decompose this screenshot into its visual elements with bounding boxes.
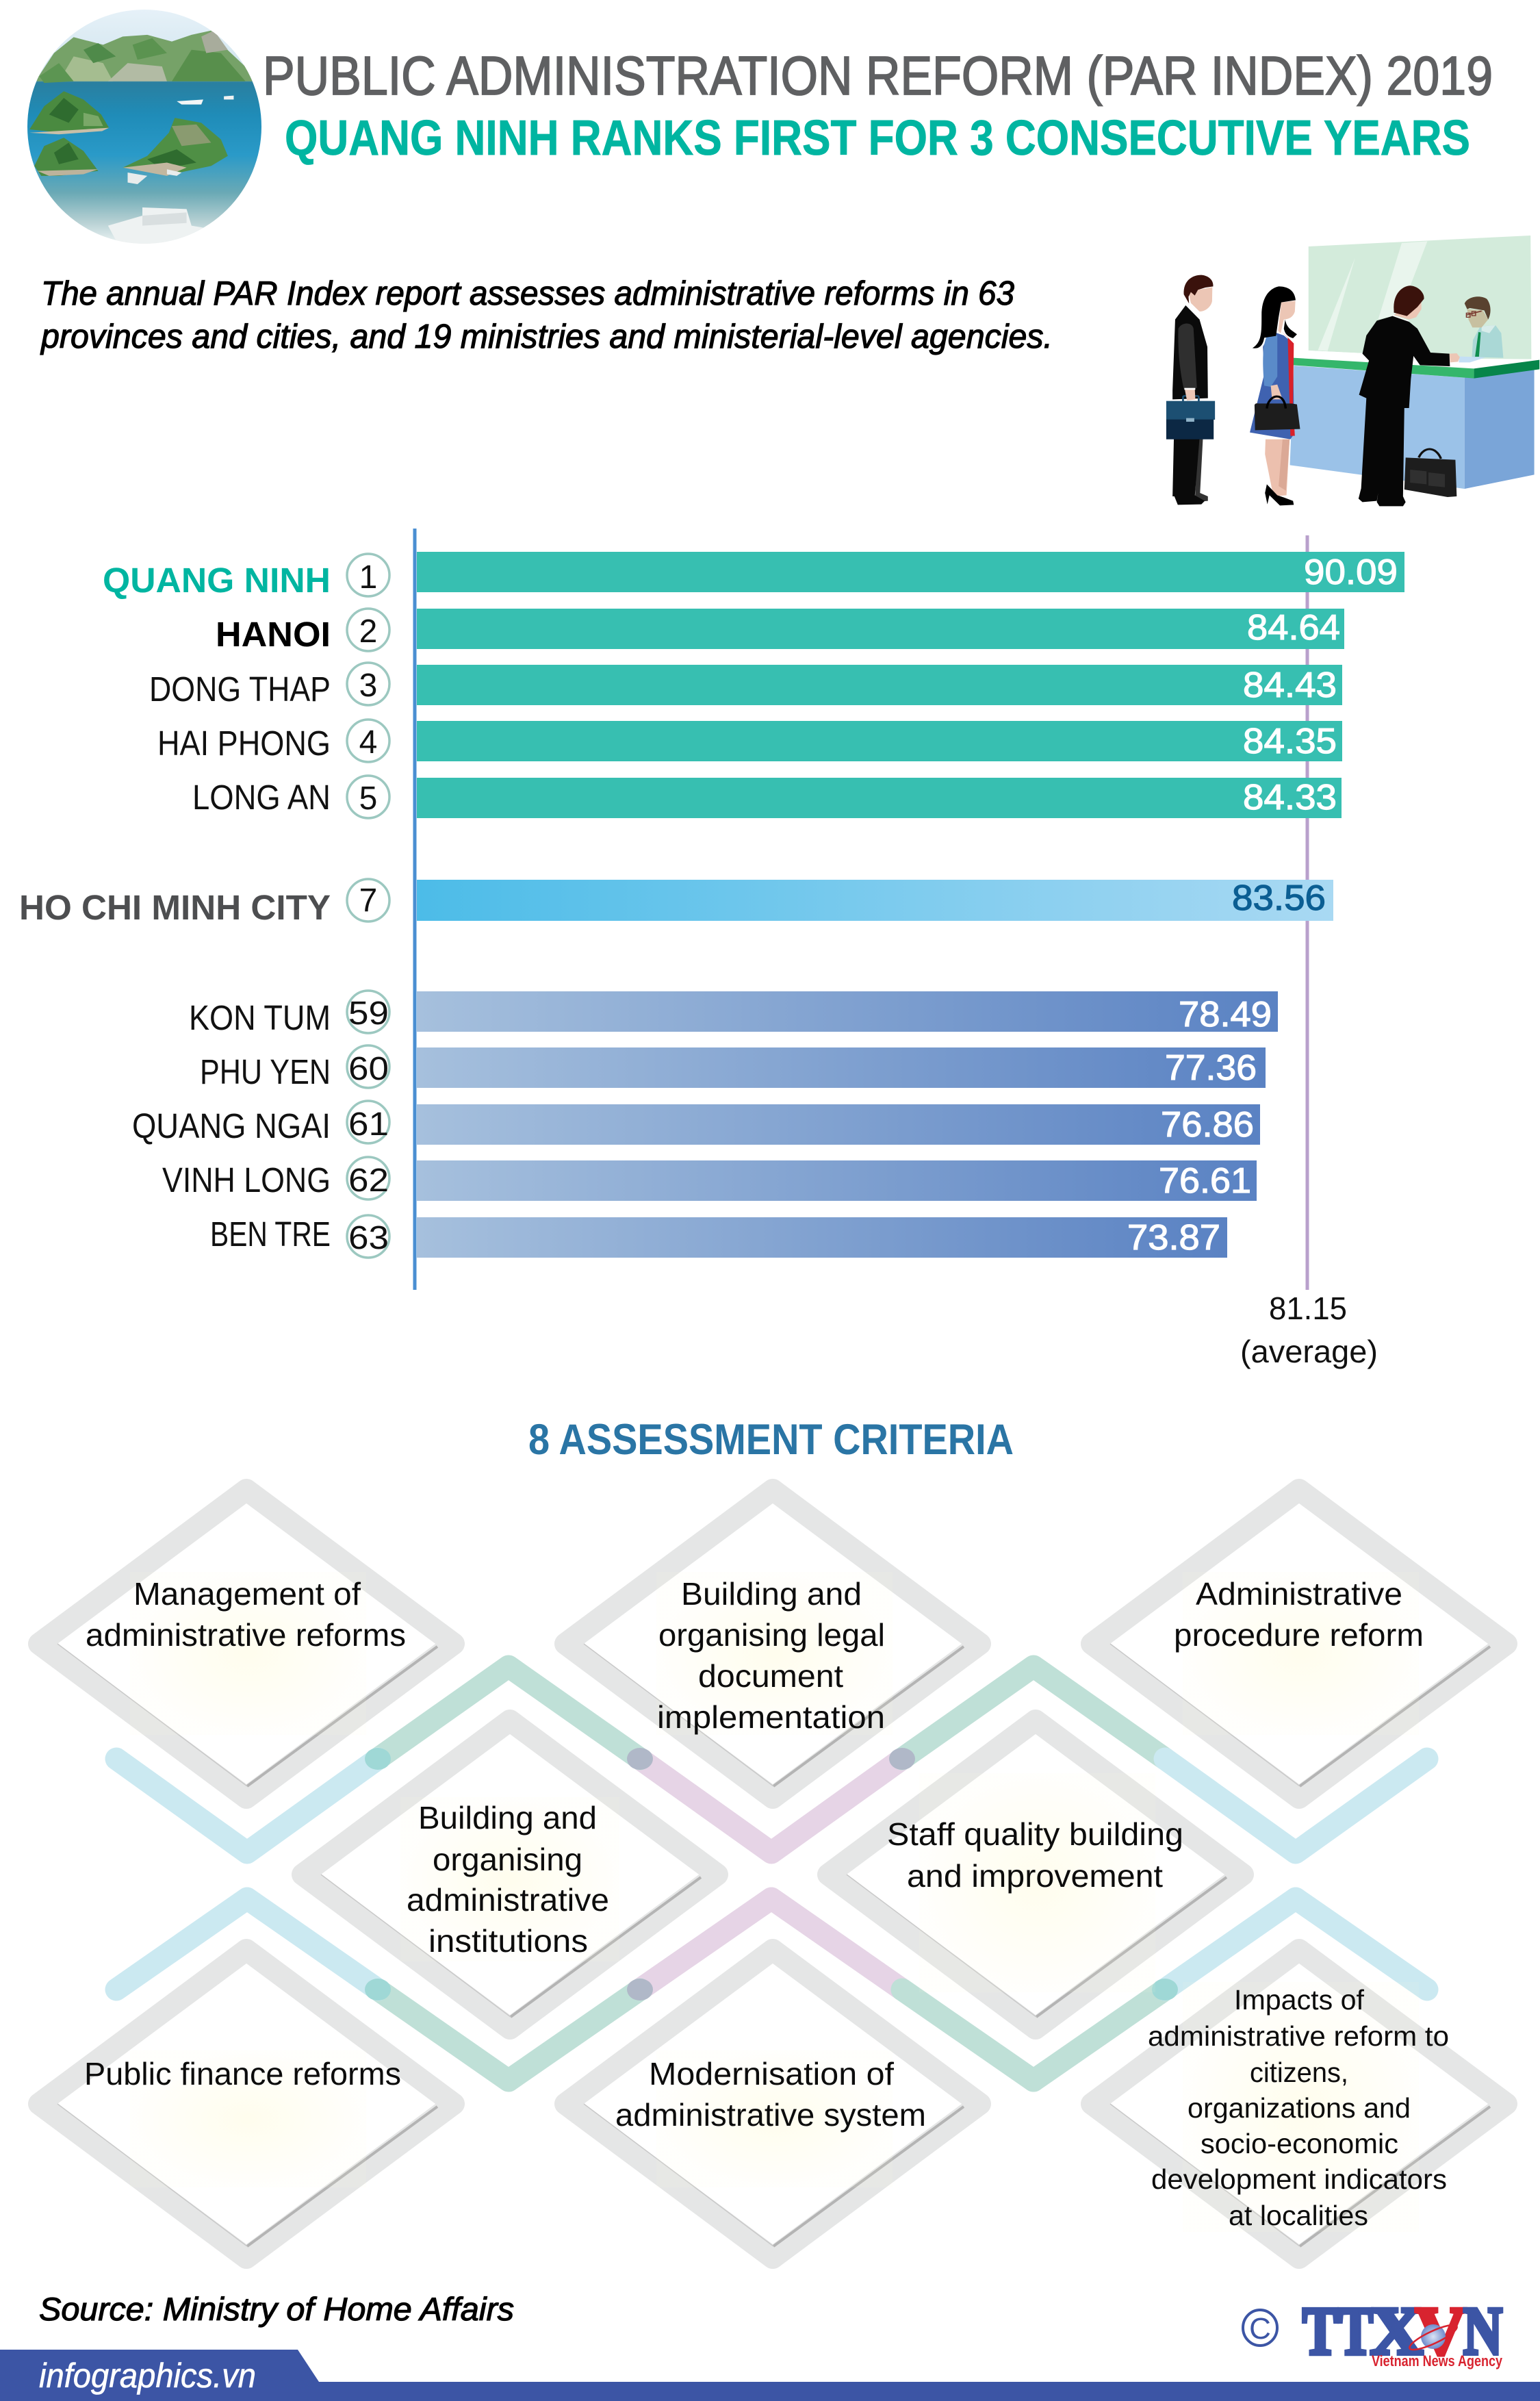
criterion: staff quality building and improvement: Staff quality building (887, 1816, 1183, 1852)
vertical axis (413, 529, 416, 1290)
intro text: provinces and cities, and 19 ministries and ministerial-level agencies. (40, 318, 1053, 355)
criterion: public finance reforms (39, 1950, 454, 2258)
criterion: management of administrative reforms (39, 1490, 454, 1798)
criterion: management of administrative reforms: Management of (133, 1576, 361, 1612)
bar values: 84.35 (1243, 722, 1337, 761)
province labels: QUANG NGAI (132, 1106, 331, 1145)
bar values: 84.43 (1243, 665, 1337, 705)
bar values: 83.56 (1232, 878, 1326, 918)
average label (1240, 1291, 1378, 1369)
criterion: building and organising legal document implementation: organising legal (658, 1617, 885, 1653)
province labels: QUANG NINH (103, 561, 331, 600)
criterion: modernisation of administrative system: Modernisation of (649, 2056, 894, 2092)
province labels: HO CHI MINH CITY (19, 888, 331, 927)
criterion: building and organising legal document implementation: Building and (681, 1576, 862, 1612)
average label: (average) (1240, 1334, 1378, 1369)
province labels: BEN TRE (210, 1215, 331, 1254)
source: Source: Ministry of Home Affairs (39, 2291, 514, 2327)
criterion: modernisation of administrative system (565, 1950, 980, 2258)
copyright symbol: C (1249, 2312, 1271, 2346)
woman in queue (1250, 286, 1300, 505)
man in queue (1166, 275, 1215, 505)
province labels: HAI PHONG (157, 724, 331, 763)
glass screen (1309, 236, 1531, 359)
province labels: HANOI (216, 615, 331, 654)
criterion: impacts of administrative reform: Impacts of (1234, 1984, 1365, 2016)
bar values: 77.36 (1165, 1048, 1257, 1088)
rank numbers: 1 (359, 559, 377, 596)
logo: TTXVN Vietnam News Agency: N (1463, 2293, 1502, 2369)
criterion: building and organising legal document implementation: implementation (657, 1699, 885, 1735)
bar values: 76.61 (1159, 1161, 1251, 1201)
bar values: 76.86 (1161, 1105, 1254, 1145)
bar values (1127, 552, 1398, 1258)
photo: Ha Long Bay in a circle (27, 10, 261, 244)
criterion: impacts of administrative reform: citizens, (1250, 2057, 1348, 2088)
rank numbers: 4 (359, 724, 377, 761)
rank numbers (359, 559, 377, 919)
rank numbers: 5 (359, 780, 377, 817)
bar values: 78.49 (1179, 995, 1272, 1034)
criterion: public finance reforms: Public finance reforms (84, 2056, 401, 2092)
two-digit rank numbers: 59 (348, 995, 389, 1032)
rank circles (347, 554, 389, 1258)
bar chart: provincial PAR index rankings (19, 529, 1404, 1369)
logo: TTXVN Vietnam News Agency: Vietnam News Agency (1372, 2352, 1503, 2370)
average label: 81.15 (1269, 1291, 1347, 1326)
heading: 8 assessment criteria: 8 ASSESSMENT CRITERIA (528, 1416, 1014, 1464)
bottom five bars (417, 991, 1278, 1258)
logo: TTXVN Vietnam News Agency: V (1415, 2293, 1466, 2369)
criterion: building and organising administrative institutions: institutions (428, 1923, 588, 1959)
province labels: PHU YEN (200, 1052, 331, 1091)
rank numbers: 2 (359, 613, 377, 650)
criterion: building and organising administrative institutions (303, 1720, 717, 2029)
footer band (0, 2350, 1540, 2401)
criterion: impacts of administrative reform: administrative reform to (1148, 2020, 1449, 2052)
two-digit rank numbers (348, 995, 389, 1256)
province labels: DONG THAP (149, 670, 331, 709)
criterion: impacts of administrative reform: development indicators (1151, 2163, 1447, 2195)
copyright symbol (1243, 2310, 1277, 2346)
province labels: KON TUM (189, 998, 331, 1037)
man at the counter (1359, 285, 1460, 506)
criterion: staff quality building and improvement: and improvement (907, 1858, 1163, 1894)
criterion: building and organising legal document implementation: document (698, 1658, 843, 1694)
criterion: administrative procedure reform: Administrative (1196, 1576, 1402, 1612)
province labels: VINH LONG (162, 1160, 331, 1199)
two-digit rank numbers: 60 (348, 1051, 389, 1087)
criterion: impacts of administrative reform: organizations and (1188, 2092, 1411, 2124)
bar values: 90.09 (1304, 552, 1398, 592)
criterion: building and organising administrative institutions: administrative (407, 1882, 609, 1918)
Ho Chi Minh City bar (417, 880, 1333, 921)
criterion: staff quality building and improvement (828, 1720, 1243, 2029)
bag on the floor (1404, 449, 1456, 497)
intro text: The annual PAR Index report assesses administrative reforms in 63 (41, 275, 1014, 312)
bar values: 84.33 (1243, 778, 1337, 817)
logo: TTXVN Vietnam News Agency: T (1302, 2293, 1338, 2369)
average line (1306, 535, 1309, 1290)
logo: TTXVN Vietnam News Agency (1302, 2293, 1503, 2370)
two-digit rank numbers: 62 (348, 1163, 389, 1199)
criterion: building and organising administrative institutions: organising (433, 1842, 582, 1877)
two-digit rank numbers: 63 (348, 1220, 389, 1256)
bar values: 73.87 (1127, 1218, 1220, 1258)
province labels (19, 561, 331, 1254)
criterion: building and organising legal document implementation (565, 1490, 980, 1798)
two-digit rank numbers: 61 (348, 1106, 389, 1143)
rank numbers: 7 (359, 882, 377, 919)
counter (1290, 351, 1539, 489)
logo: TTXVN Vietnam News Agency: X (1370, 2293, 1423, 2369)
criterion: impacts of administrative reform: socio-economic (1201, 2128, 1398, 2159)
connecting zigzag ribbons (116, 1666, 1427, 2081)
criterion: impacts of administrative reform (1092, 1950, 1506, 2258)
illustration: people queueing at a service counter (1166, 236, 1539, 506)
criterion: impacts of administrative reform: at localities (1229, 2200, 1368, 2231)
top five bars (417, 552, 1404, 818)
rank numbers: 3 (359, 668, 377, 704)
criterion: modernisation of administrative system: administrative system (615, 2097, 926, 2133)
bar values: 84.64 (1247, 608, 1340, 648)
criterion: administrative procedure reform: procedure reform (1174, 1617, 1424, 1653)
criterion: administrative procedure reform (1092, 1490, 1506, 1798)
criterion: management of administrative reforms: administrative reforms (86, 1617, 406, 1653)
footer website: infographics.vn (39, 2356, 256, 2395)
clerk (1465, 296, 1503, 358)
intro text (40, 275, 1053, 355)
province labels: LONG AN (192, 778, 331, 817)
logo: TTXVN Vietnam News Agency: T (1338, 2293, 1373, 2369)
criterion: building and organising administrative institutions: Building and (418, 1800, 597, 1835)
